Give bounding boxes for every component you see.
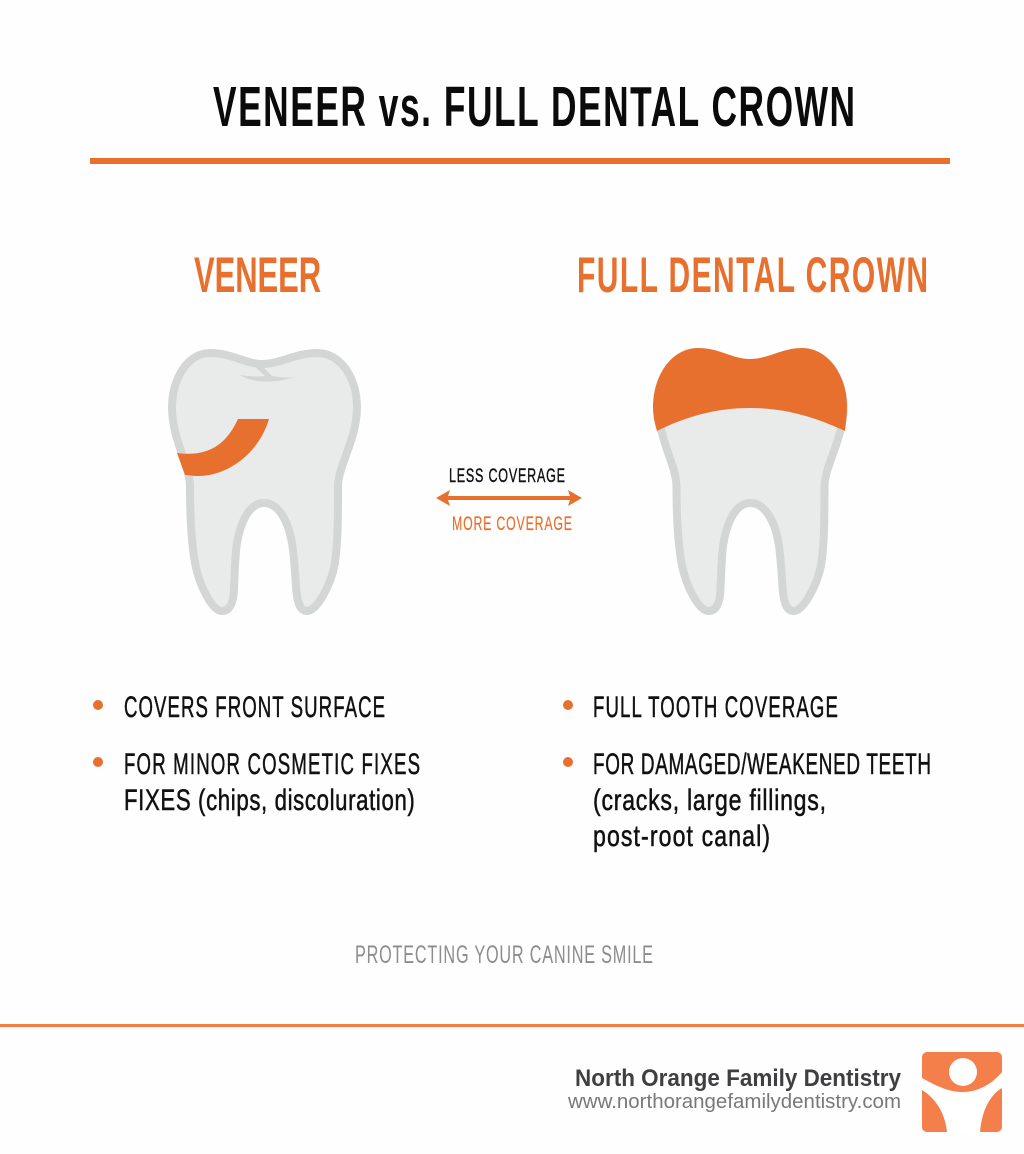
footer divider: [0, 1024, 1024, 1027]
bullet dot: [563, 700, 573, 710]
bullet continuation 2: post-root canal): [593, 819, 770, 853]
icon: tooth with full crown: [653, 348, 847, 611]
title underline: [90, 158, 950, 164]
footer brand name: North Orange Family Dentistry: [575, 1065, 902, 1092]
tooth crack detail: [240, 366, 294, 382]
title: VENEER vs. FULL DENTAL CROWN: [213, 76, 855, 139]
coverage comparison: [436, 465, 582, 535]
veneer bullet list: [93, 691, 420, 817]
bullet: covers front surface: COVERS FRONT SURFACE: [124, 691, 385, 724]
icon: tooth with veneer: [172, 353, 357, 611]
bullet dot: [563, 757, 573, 767]
crown cap: [653, 348, 847, 431]
label: more coverage: MORE COVERAGE: [452, 513, 572, 535]
crown bullet list: [563, 691, 931, 853]
bullet: damaged teeth: FOR DAMAGED/WEAKENED TEETH: [593, 748, 931, 781]
bullet: full tooth coverage: FULL TOOTH COVERAGE: [593, 691, 838, 724]
double arrow: [436, 490, 582, 506]
heading: veneer: VENEER: [194, 246, 321, 303]
tagline: PROTECTING YOUR CANINE SMILE: [355, 942, 653, 969]
bullet dot: [93, 757, 103, 767]
heading: full dental crown: FULL DENTAL CROWN: [577, 247, 928, 303]
bullet dot: [93, 700, 103, 710]
bullet: minor cosmetic fixes: FOR MINOR COSMETIC FIXES: [124, 748, 420, 781]
label: less coverage: LESS COVERAGE: [449, 465, 565, 487]
bullet continuation 1: (cracks, large fillings,: [593, 783, 826, 817]
footer url: www.northorangefamilydentistry.com: [567, 1091, 901, 1113]
veneer highlight: [177, 419, 269, 476]
logo: [922, 1052, 1002, 1132]
bullet continuation: FIXES (chips, discoluration): [124, 783, 415, 817]
